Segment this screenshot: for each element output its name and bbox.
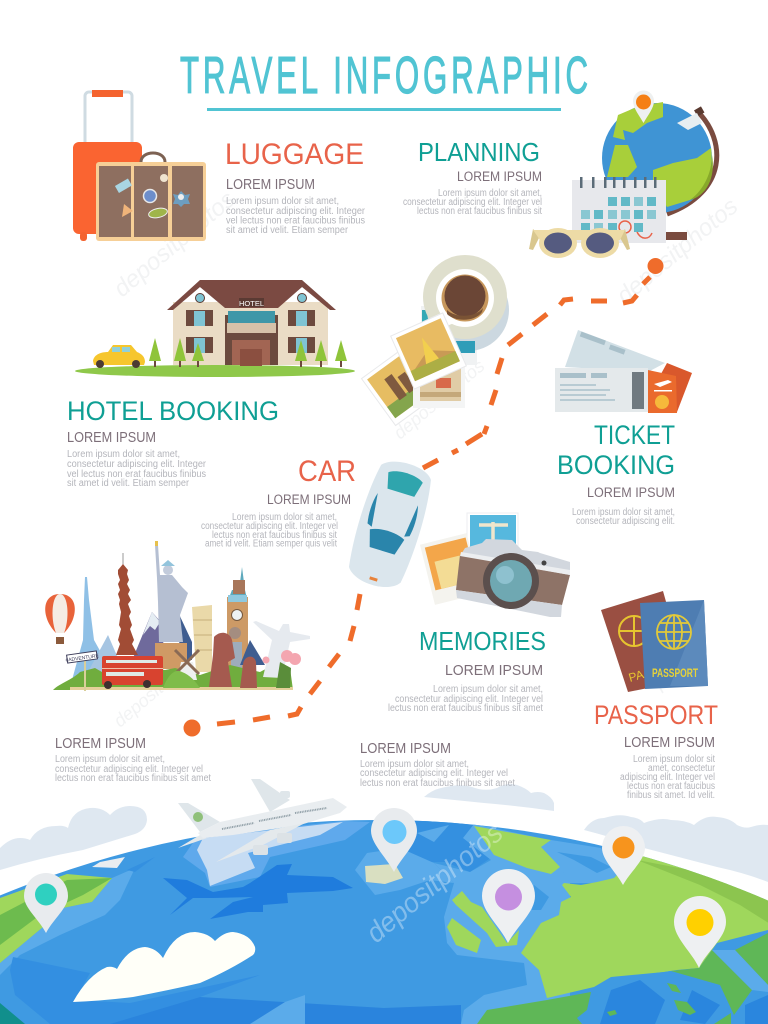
- subheading: LOREM IPSUM: [267, 492, 351, 507]
- globe: earth: [0, 800, 768, 1024]
- lower hemisphere shade: left: [10, 957, 260, 1024]
- watermark: depositphotos: depositphotos: [360, 817, 509, 949]
- upper ocean dark patch: [408, 820, 489, 872]
- leaning tower of pisa: [192, 605, 212, 672]
- subheading: LOREM IPSUM: [55, 736, 146, 752]
- body text: Lorem ipsum dolor sit amet,: [226, 196, 339, 207]
- body text: Lorem ipsum dolor sit amet,: [232, 512, 337, 523]
- body text: sit amet id velit. Etiam semper: [67, 478, 190, 489]
- photo: temple: [391, 313, 466, 389]
- land: islands: [452, 891, 519, 947]
- watermarks: deposit: [110, 678, 168, 731]
- subheading: LOREM IPSUM: [445, 662, 543, 679]
- text block: planning: [403, 137, 542, 217]
- icon: coffee and photos: [361, 255, 509, 426]
- body text: sit amet id velit. Etiam semper: [226, 225, 349, 236]
- text block: hotel booking: [67, 396, 279, 489]
- ocean patch beside island: [532, 885, 549, 910]
- body text: consectetur adipiscing elit. Integer vel: [403, 197, 542, 208]
- wake under plane: [183, 821, 370, 887]
- subheading: LOREM IPSUM: [587, 485, 675, 500]
- text block: memories: [388, 626, 546, 714]
- icon: hot air balloon: [45, 594, 75, 644]
- body text: amet, consectetur: [648, 763, 716, 774]
- text block: ticket booking: [557, 420, 675, 527]
- icon: moai statues: [209, 633, 257, 688]
- body text: consectetur adipiscing elit. Integer vel: [395, 694, 543, 705]
- heading: hotel booking: HOTEL BOOKING: [67, 396, 279, 426]
- body text: adipiscing elit. Integer vel: [620, 772, 715, 783]
- body text: lectus non erat faucibus finibus sit: [417, 206, 542, 217]
- pin: orange: [602, 826, 645, 885]
- body text: Lorem ipsum dolor sit amet,: [55, 754, 165, 765]
- pin: purple: [482, 869, 535, 943]
- body text: Lorem ipsum dolor sit amet,: [360, 759, 469, 770]
- pin: sky blue: [371, 808, 417, 872]
- icon: globe, calendar and sunglasses: [529, 91, 717, 258]
- statue of liberty: [155, 541, 188, 642]
- watermarks: depositphotos: [612, 193, 743, 310]
- body text: [360, 759, 515, 789]
- ocean bay: [541, 840, 620, 883]
- pin: teal: [24, 873, 68, 933]
- body text: consectetur adipiscing elit.: [576, 516, 675, 527]
- body text: lectus non erat faucibus finibus sit: [212, 530, 337, 541]
- icon: passports: [601, 591, 708, 692]
- body text: Lorem ipsum dolor sit amet,: [572, 507, 675, 518]
- mountains: [88, 612, 192, 672]
- body text: consectetur adipiscing elit. Integer vel: [360, 768, 508, 779]
- body text: lectus non erat faucibus: [627, 781, 715, 792]
- globe emblem: [657, 615, 691, 649]
- icon: passports: PA: [627, 667, 645, 685]
- icon: windmill: [175, 650, 199, 680]
- text block: car: [201, 455, 356, 550]
- land: left continent: [0, 874, 112, 1024]
- text block: lower middle: [360, 741, 515, 789]
- watermarks: [109, 186, 743, 731]
- body text: consectetur adipiscing elit. Integer vel: [55, 764, 203, 775]
- body text: [55, 754, 211, 784]
- text block: ticket booking: BOOKING: [557, 450, 675, 480]
- body text: lectus non erat faucibus finibus sit amet: [388, 703, 543, 714]
- big ben: [227, 567, 248, 673]
- icon: hotel: [75, 280, 355, 377]
- clouds: background: [0, 784, 768, 882]
- icon: luggage: [73, 90, 206, 241]
- photo: tall stones: [361, 344, 443, 426]
- heading: car: CAR: [298, 455, 356, 488]
- body text: finibus sit amet. Id velit.: [627, 790, 715, 801]
- body text: consectetur adipiscing elit. Integer: [67, 459, 207, 470]
- land: northern coast: [474, 826, 560, 874]
- body text: Lorem ipsum dolor sit amet,: [67, 449, 180, 460]
- route: dashed path lower: [184, 594, 360, 736]
- ocean shallows: [0, 824, 570, 1024]
- icon: hotel: HOTEL: [239, 299, 264, 308]
- heading: luggage: LUGGAGE: [225, 138, 364, 171]
- pagoda: [116, 553, 138, 655]
- heading: passport: PASSPORT: [594, 700, 718, 730]
- body text: vel lectus non erat faucibus finibus: [67, 469, 206, 480]
- watermarks: depositphotos: [390, 356, 488, 443]
- icon: signpost: [65, 651, 100, 691]
- text block: passport: [594, 700, 718, 801]
- streak: [128, 858, 153, 872]
- subheading: LOREM IPSUM: [624, 735, 715, 751]
- icon: white cloud: [73, 932, 255, 1002]
- photo: blue behind cup: [421, 306, 477, 365]
- subheading: LOREM IPSUM: [67, 430, 156, 446]
- text block: luggage: [225, 138, 366, 236]
- body text: amet id velit. Etiam semper quis velit: [205, 538, 337, 550]
- watermarks: photos: [648, 638, 709, 694]
- southeast ocean: [656, 971, 670, 973]
- body text: [388, 684, 543, 714]
- subheading: LOREM IPSUM: [457, 169, 542, 184]
- body text: [572, 507, 675, 527]
- icon: airplane: [178, 779, 347, 862]
- body text: [67, 449, 207, 489]
- body text: [620, 754, 716, 801]
- title: TRAVEL INFOGRAPHIC: [180, 47, 588, 105]
- subheading: LOREM IPSUM: [226, 177, 315, 193]
- body text: vel lectus non erat faucibus finibus: [226, 216, 365, 226]
- heading: planning: PLANNING: [418, 137, 540, 167]
- land: southern: [477, 992, 591, 1024]
- body text: Lorem ipsum dolor sit amet,: [433, 684, 543, 695]
- pin: yellow: [674, 896, 726, 968]
- body text: Lorem ipsum dolor sit amet,: [438, 188, 542, 199]
- ground: [53, 664, 293, 690]
- body text: consectetur adipiscing elit. Integer: [226, 206, 366, 217]
- icon: tickets: [555, 330, 692, 413]
- body text: lectus non erat faucibus finibus sit amet: [55, 773, 211, 784]
- body text: [201, 512, 338, 550]
- subheading: LOREM IPSUM: [360, 741, 451, 757]
- body text: consectetur adipiscing elit. Integer vel: [201, 521, 338, 532]
- heading: memories: MEMORIES: [419, 626, 546, 656]
- body text: lectus non erat faucibus finibus sit amet: [360, 778, 515, 789]
- icon: double decker bus: [102, 656, 163, 689]
- body text: Lorem ipsum dolor sit: [633, 754, 715, 765]
- icon: taxi: [93, 345, 145, 368]
- icon: passports: PASSPORT: [652, 666, 698, 680]
- watermarks: depositphotos: [109, 186, 240, 303]
- heading: ticket booking: TICKET: [594, 420, 675, 450]
- text block: lower left: [55, 736, 211, 784]
- photo: boat: [413, 360, 465, 408]
- land: main continent: [521, 855, 768, 998]
- icon: signpost: #ADVENTURE: [65, 653, 100, 664]
- christ the redeemer: [253, 621, 310, 678]
- icon: camera and photos: [420, 513, 570, 617]
- eiffel tower: [72, 577, 110, 680]
- icon: landmarks: [45, 541, 310, 691]
- plane shadow: [163, 864, 353, 919]
- icon: car: [342, 455, 438, 594]
- body text: [226, 196, 366, 236]
- body text: [403, 188, 542, 217]
- route: dashed path upper: [423, 258, 664, 468]
